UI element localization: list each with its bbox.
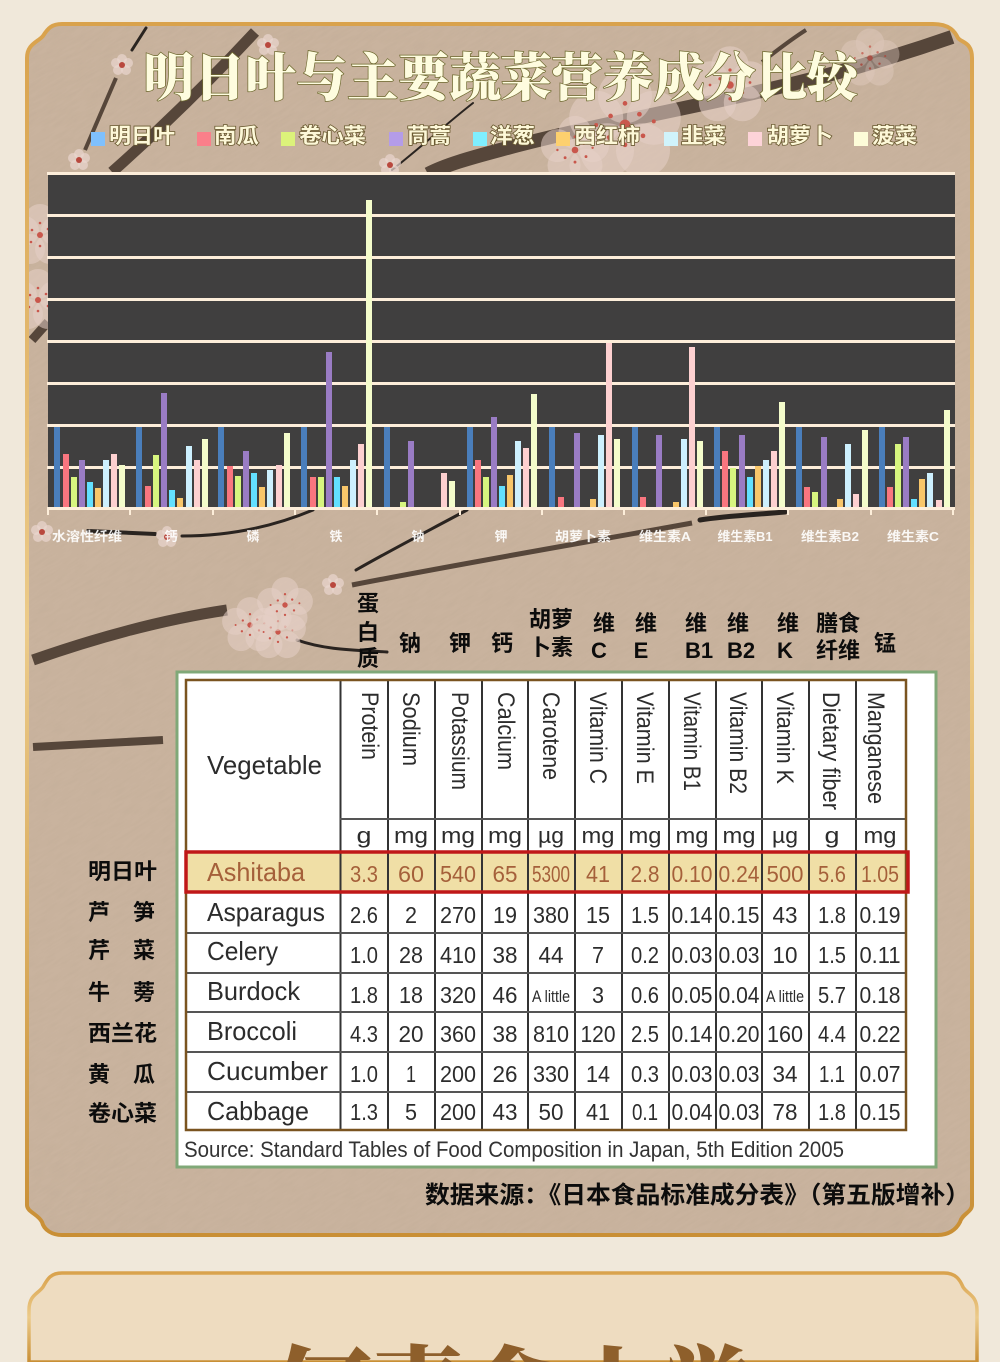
Chinese row labels: 明日叶 (88, 859, 157, 884)
units row: g (824, 823, 840, 848)
bars: 维生素C (879, 410, 950, 507)
row: Cabbage: 50 (538, 1099, 564, 1125)
chart x-axis labels: 磷 (246, 529, 260, 544)
row: Asparagus: 2 (405, 902, 417, 928)
legend item: 卷心菜: 卷心菜 (299, 125, 366, 148)
Chinese column headers: 维 (727, 611, 749, 636)
row: Asparagus: 0.14 (672, 902, 713, 928)
row: Cucumber: 0.07 (860, 1061, 900, 1087)
rotated nutrient headers: Manganese (862, 692, 889, 804)
Chinese column headers: 质 (357, 646, 379, 671)
row: Burdock: 46 (492, 982, 518, 1008)
row: Broccoli: 360 (440, 1021, 476, 1047)
Chinese column headers: 纤维 (816, 638, 860, 663)
row: Asparagus: 270 (440, 902, 476, 928)
row: Ashitaba: 1.05 (861, 861, 899, 887)
row: Cabbage: 41 (586, 1099, 610, 1125)
row: Celery (207, 936, 900, 968)
row: Ashitaba: 2.8 (630, 861, 660, 887)
row: Cucumber: 14 (586, 1061, 610, 1087)
bars: 维生素B2 (796, 427, 868, 507)
row: Burdock: 0.6 (631, 982, 659, 1008)
row: Broccoli: 38 (492, 1021, 518, 1047)
row: Asparagus: 1.8 (818, 902, 846, 928)
row: Celery: 1.0 (350, 942, 378, 968)
row: Broccoli (207, 1016, 900, 1047)
row: Cabbage: 0.04 (672, 1099, 713, 1125)
units row (356, 823, 896, 848)
row: Ashitaba: 41 (586, 861, 610, 887)
row: Celery: 410 (440, 942, 476, 968)
table grid (186, 680, 906, 1130)
bars: 胡萝卜素 (549, 343, 620, 507)
chart x-axis labels: 维生素B1 (718, 529, 772, 544)
rotated nutrient headers (356, 692, 889, 810)
chart x-axis labels: 钙 (164, 529, 178, 544)
units row: g (356, 823, 372, 848)
row: Broccoli: 2.5 (631, 1021, 659, 1047)
row: Burdock: 18 (399, 982, 423, 1008)
row: Cucumber: 0.03 (718, 1061, 760, 1087)
row: Celery: 0.2 (631, 942, 659, 968)
chart x-axis labels (52, 529, 940, 544)
row: Cabbage: 1.8 (818, 1099, 846, 1125)
row: Broccoli: 120 (580, 1021, 616, 1047)
row: Ashitaba: 5300 (532, 861, 570, 887)
row: Cucumber: 26 (492, 1061, 518, 1087)
Chinese row labels: 牛蒡 (88, 980, 155, 1005)
legend item: 菠菜: 菠菜 (872, 125, 917, 148)
units row: mg (394, 823, 428, 848)
row: Broccoli: 810 (533, 1021, 569, 1047)
row: Ashitaba: 65 (492, 861, 518, 887)
row: Burdock (207, 976, 900, 1008)
units row: mg (628, 823, 662, 848)
row: Burdock: 0.18 (860, 982, 900, 1008)
Chinese column headers: C (591, 638, 607, 663)
row: Broccoli: 0.20 (718, 1021, 760, 1047)
Chinese column headers: 白 (357, 620, 379, 645)
row: Asparagus: Asparagus (207, 897, 325, 927)
Chinese column headers: 钾 (449, 631, 471, 656)
legend item: 洋葱 (473, 125, 535, 148)
units row: mg (582, 823, 614, 848)
Chinese column headers: 维 (635, 611, 657, 636)
bars: 磷 (218, 427, 290, 507)
Chinese column headers: B2 (727, 638, 755, 663)
row: Asparagus: 2.6 (350, 902, 378, 928)
rotated nutrient headers: Dietary fiber (817, 692, 844, 810)
legend item: 南瓜: 南瓜 (214, 125, 259, 148)
row: Cucumber: 330 (533, 1061, 569, 1087)
row: Cabbage: Cabbage (207, 1096, 309, 1126)
units row: µg (772, 823, 798, 848)
units row: mg (488, 823, 522, 848)
Chinese column headers: B1 (685, 638, 713, 663)
row: Burdock: 320 (440, 982, 476, 1008)
Chinese column headers: 蛋 (357, 591, 379, 616)
row: Cucumber: 1.1 (819, 1061, 845, 1087)
row: Cucumber: 1.0 (350, 1061, 378, 1087)
rotated nutrient headers: Vitamin K (771, 692, 798, 784)
bars: 钾 (467, 394, 537, 507)
row: Asparagus: 0.19 (860, 902, 900, 928)
row: Celery: 28 (399, 942, 423, 968)
rotated nutrient headers: Vitamin E (631, 692, 658, 784)
row: Broccoli: 0.14 (672, 1021, 713, 1047)
rotated nutrient headers: Sodium (397, 692, 424, 766)
row: Burdock: 5.7 (818, 982, 846, 1008)
rotated nutrient headers: Calcium (492, 692, 519, 770)
Chinese column headers: 膳食 (816, 611, 860, 636)
Chinese column headers: 锰 (874, 631, 896, 656)
Chinese column headers: E (634, 638, 648, 663)
row: Cabbage: 200 (440, 1099, 476, 1125)
row: Cucumber: 0.3 (631, 1061, 659, 1087)
units row: mg (864, 823, 896, 848)
row: Broccoli: 4.3 (350, 1021, 378, 1047)
row: Broccoli: 4.4 (818, 1021, 846, 1047)
legend item: 韭菜: 韭菜 (681, 125, 726, 148)
Chinese column headers: 维 (777, 611, 799, 636)
chart x-axis labels: 维生素A (639, 529, 692, 544)
row: Celery: 0.03 (718, 942, 760, 968)
legend (91, 125, 917, 148)
rotated nutrient headers: Potassium (446, 692, 473, 790)
Chinese row labels: 芦笋 (88, 900, 155, 925)
row: Burdock: A little (766, 987, 804, 1006)
bar chart (47, 172, 955, 515)
row: Celery: Celery (207, 936, 278, 966)
row: Broccoli: Broccoli (207, 1016, 297, 1046)
Ashitaba highlight box (186, 852, 908, 892)
row: Cabbage: 0.15 (860, 1099, 900, 1125)
row: Celery: 44 (538, 942, 564, 968)
legend item: 南瓜 (197, 125, 259, 148)
row: Burdock: 3 (592, 982, 604, 1008)
row: Broccoli: 20 (398, 1021, 424, 1047)
title: 明日叶与主要蔬菜营养成分比较 (143, 36, 862, 111)
chart x-axis labels: 铁 (329, 529, 343, 544)
row: Cabbage (207, 1096, 900, 1126)
row: Cabbage: 0.03 (718, 1099, 760, 1125)
nutrient data table card (177, 672, 936, 1167)
row: Cucumber: 0.03 (672, 1061, 712, 1087)
row: Ashitaba: 540 (440, 861, 476, 887)
panel: next section (29, 1273, 977, 1362)
Chinese row labels: 西兰花 (88, 1021, 157, 1046)
units row: µg (538, 823, 564, 848)
Chinese column headers: 胡萝 (529, 607, 573, 632)
Chinese row labels: 黄瓜 (88, 1062, 155, 1087)
row: Burdock: 1.8 (350, 982, 378, 1008)
row: Ashitaba (207, 857, 899, 887)
units row: mg (441, 823, 475, 848)
bars: 维生素A (632, 347, 703, 507)
chart x-axis labels: 钠 (411, 529, 425, 544)
Chinese column headers: 维 (593, 611, 615, 636)
Chinese column headers: 卜素 (529, 635, 573, 660)
units row: mg (722, 823, 756, 848)
legend item: 胡萝卜: 胡萝卜 (767, 125, 833, 148)
row: Ashitaba: 500 (766, 861, 804, 887)
row: Cucumber (207, 1056, 900, 1087)
units row: mg (676, 823, 708, 848)
rotated nutrient headers: Carotene (537, 692, 564, 780)
row: Asparagus: 1.5 (631, 902, 659, 928)
row: Ashitaba: Ashitaba (207, 857, 306, 887)
plum blossom branches (7, 28, 952, 747)
row: Ashitaba: 5.6 (818, 861, 846, 887)
row: Celery: 0.11 (860, 942, 900, 968)
rotated nutrient headers: Vitamin C (584, 692, 611, 784)
legend item: 茼蒿: 茼蒿 (407, 125, 451, 148)
row: Asparagus: 43 (772, 902, 798, 928)
row: Celery: 7 (592, 942, 604, 968)
English source note: Source: Standard Tables of Food Composition in Japan, 5th Edition 2005 (184, 1137, 844, 1162)
chart x-axis labels: 维生素B2 (801, 529, 859, 544)
row: Cabbage: 1.3 (350, 1099, 378, 1125)
row: Broccoli: 0.22 (860, 1021, 900, 1047)
Chinese column headers: 钠 (399, 631, 421, 656)
legend item: 洋葱: 洋葱 (490, 125, 535, 148)
row: Burdock: Burdock (207, 976, 301, 1006)
Chinese column headers: 钙 (491, 631, 513, 656)
row: Cabbage: 0.1 (632, 1099, 658, 1125)
row: Cabbage: 78 (772, 1099, 798, 1125)
Chinese source note: 数据来源：《日本食品标准成分表》（第五版增补） (425, 1181, 970, 1209)
row: Cabbage: 5 (405, 1099, 417, 1125)
row: Burdock: A little (532, 987, 570, 1006)
bars: 水溶性纤维 (54, 427, 125, 507)
legend item: 明日叶: 明日叶 (109, 125, 175, 148)
row: Celery: 10 (772, 942, 798, 968)
rotated nutrient headers: Protein (356, 692, 383, 760)
row: Asparagus: 19 (493, 902, 517, 928)
legend item: 韭菜 (664, 125, 726, 148)
Chinese column headers: K (777, 638, 793, 663)
row: Cucumber: Cucumber (207, 1056, 328, 1086)
row: Celery: 38 (492, 942, 518, 968)
Chinese row labels: 卷心菜 (88, 1101, 157, 1126)
row: Cucumber: 34 (772, 1061, 798, 1087)
chart x-axis labels: 钾 (494, 529, 508, 544)
bars: 钙 (136, 393, 208, 507)
Chinese column headers: 维 (685, 611, 707, 636)
row: Cabbage: 43 (492, 1099, 518, 1125)
row: Ashitaba: 0.10 (672, 861, 712, 887)
row: Asparagus: 380 (533, 902, 569, 928)
row: Broccoli: 160 (767, 1021, 803, 1047)
row: Cucumber: 1 (406, 1061, 416, 1087)
row: Asparagus (207, 897, 900, 928)
bars: 维生素B1 (714, 402, 785, 507)
Chinese row labels (88, 859, 157, 1126)
row: Celery: 0.03 (672, 942, 712, 968)
row: Burdock: 0.05 (672, 982, 712, 1008)
row: Asparagus: 0.15 (718, 902, 760, 928)
chart x-axis labels: 水溶性纤维 (52, 529, 122, 544)
bars: 钠 (384, 427, 455, 507)
bars: 铁 (301, 200, 372, 507)
legend item: 茼蒿 (389, 125, 451, 148)
row: Ashitaba: 3.3 (350, 861, 378, 887)
row: Ashitaba: 0.24 (718, 861, 760, 887)
chart x-axis labels: 维生素C (887, 529, 940, 544)
row: Burdock: 0.04 (718, 982, 760, 1008)
chart x-axis labels: 胡萝卜素 (555, 529, 611, 544)
row: Asparagus: 15 (586, 902, 610, 928)
Chinese row labels: 芹菜 (88, 938, 155, 963)
row: Cucumber: 200 (440, 1061, 476, 1087)
rotated nutrient headers: Vitamin B1 (678, 692, 705, 791)
rotated nutrient headers: Vitamin B2 (724, 692, 751, 794)
row: Ashitaba: 60 (398, 861, 424, 887)
legend item: 菠菜 (854, 125, 917, 148)
header: vegetable: Vegetable (207, 750, 322, 780)
Chinese column headers (357, 591, 896, 671)
legend item: 西红柿: 西红柿 (574, 125, 640, 148)
row: Celery: 1.5 (818, 942, 846, 968)
